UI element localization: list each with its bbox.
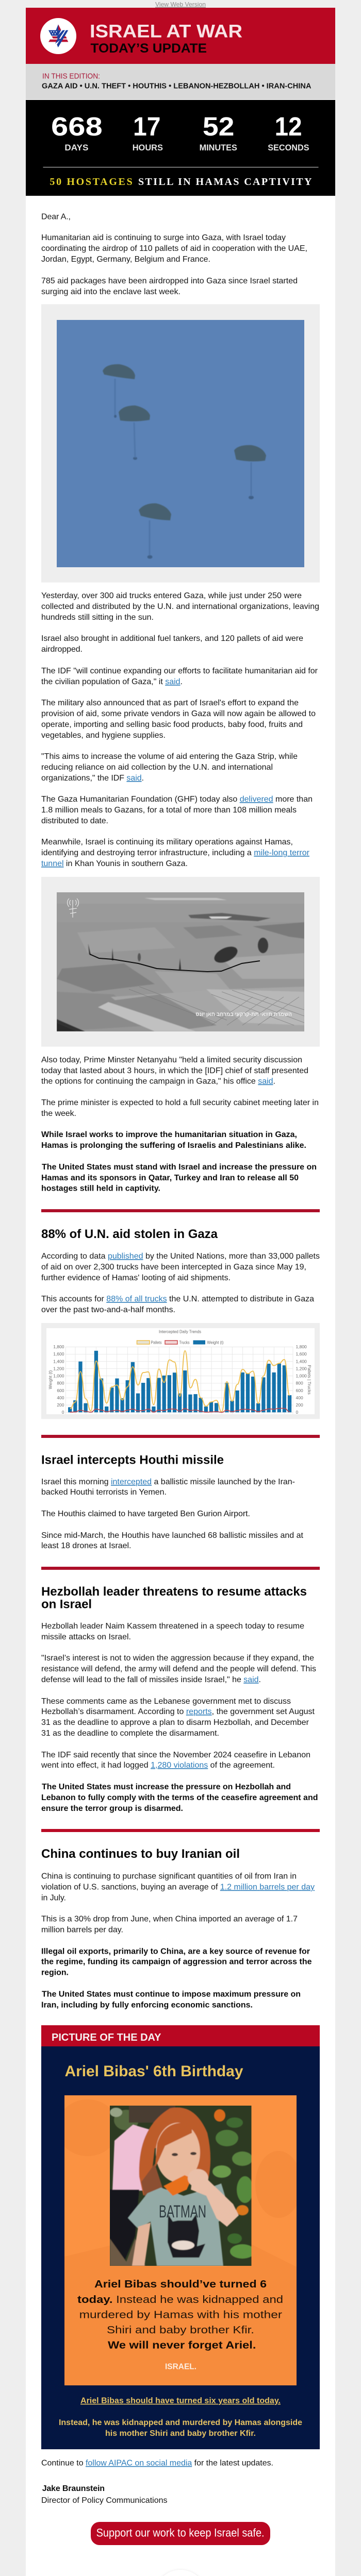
bold paragraph: illegal oil exports: region. [41,1969,69,1977]
paragraph: private vendors: vegetables, and hygiene supplies. [41,731,166,740]
left axis labels: 800 [57,1381,64,1386]
paragraph: GHF meals: distributed to date. [41,817,108,825]
paragraph: 88 percent of trucks: This accounts for 88% of all trucks the U.N. attempted to distribute in Gaza [41,1295,314,1303]
left axis labels: 1,400 [53,1359,64,1364]
icon: AIPAC logo badge [155,2570,206,2576]
paragraph: Kassem speech [41,1622,304,1641]
paragraph: fuel tankers: airdropped. [41,645,83,654]
paragraph: 88 percent of trucks [41,1295,314,1314]
paragraph: missile count: Since mid-March, the Houthis have launched 68 ballistic missiles and at [41,1531,304,1540]
chart title: Intercepted Daily Trends [159,1329,201,1334]
view web version link: View Web Version [155,1,206,8]
paragraph: intercepted pallets: According to data published by the United Nations, more than 33,000 pallets [41,1252,320,1261]
heading: Hezbollah threat: on Israel [41,1597,92,1612]
donation button [91,2522,270,2545]
bold paragraph: Hamas prolonging suffering [41,1130,306,1150]
paragraph: aid trucks [41,591,319,622]
paragraph: Houthi interception [41,1478,295,1497]
heading: UN aid stolen: 88% of U.N. aid stolen in Gaza [41,1227,218,1241]
paragraph: China purchases: in July. [41,1894,66,1903]
countdown: seconds [268,112,309,152]
chart: intercepted daily trends [41,1323,320,1419]
right axis labels: 200 [296,1402,303,1408]
intro paragraph: Jordan, Egypt, Germany, Belgium and France. [41,255,210,264]
paragraph: security discussion [41,1056,308,1086]
paragraph: China purchases: China is continuing to purchase significant quantities of oil from Iran in [41,1872,297,1881]
sub-element: memorial message: We will never forget Ariel. [108,2340,256,2351]
greeting: Dear A., [41,212,71,221]
paragraph: security cabinet [41,1098,319,1118]
paragraph: June comparison: This is a 30% drop from June, when China imported an average of 1.7 [41,1915,298,1924]
sub-element: rubble grid texture [129,987,304,1025]
left axis labels [53,1344,64,1415]
sub-element: memorial message: Shiri and baby brother Kfir. [107,2325,254,2336]
sub-element: hebrew caption: השמדת תוואי תת-קרקעי במרחב חאן יונס [196,1011,292,1018]
sub-element: memorial message: today. Instead he was kidnapped and [77,2294,283,2306]
paragraph: Houthi interception: Israel this morning intercepted a ballistic missile launched by the Iran- [41,1478,295,1486]
panel: in this edition [26,64,335,99]
paragraph: private vendors: provision of aid, some private vendors in Gaza will now again be allowed to [41,709,316,718]
panel: in this edition: GAZA AID • U.N. THEFT • HOUTHIS • LEBANON-HEZBOLLAH • IRAN-CHINA [42,82,311,90]
picture caption: Ariel Bibas should have turned six years old today. [80,2397,281,2405]
left axis labels: 1,000 [53,1374,64,1379]
paragraph: GHF meals: The Gaza Humanitarian Foundation (GHF) today also delivered more than [41,795,313,804]
right axis labels: 0 [296,1410,298,1415]
sub-element: collapse smoke plumes [88,938,268,970]
chart legend: Trucks [179,1340,190,1345]
picture title: Ariel Bibas' 6th Birthday [65,2063,243,2080]
left axis labels: 600 [57,1388,64,1393]
right axis labels: 1,800 [296,1344,307,1349]
right axis labels: 1,400 [296,1359,307,1364]
countdown: days: DAYS [64,143,88,152]
countdown: minutes: 52 [203,112,234,141]
sub-element: watermark shapes [57,2099,302,2385]
paragraph: IDF quote: organizations," the IDF said. [41,774,144,783]
bold paragraph: maximum pressure: The United States must continue to impose maximum pressure on [42,1990,301,1999]
pallets line [70,1351,290,1412]
right axis labels: 400 [296,1395,303,1400]
heading: Hezbollah threat: Hezbollah leader threatens to resume attacks [41,1585,307,1599]
paragraph: Kassem quote: resistance will defend, the army will defend and the people will defend. This [41,1665,316,1673]
intro paragraph: coordinating the airdrop of 110 pallets of aid in cooperation with the UAE, [41,244,307,253]
countdown: minutes [200,112,237,152]
paragraph: disarmament deadlines: Hezbollah’s disarmament. According to reports, the government set August [41,1707,315,1716]
header banner [26,8,335,64]
countdown: seconds: SECONDS [268,143,309,152]
sub-element: child photo [110,2106,255,2266]
bold paragraph: illegal oil exports: Illegal oil exports, primarily to China, are a key source of revenue for [41,1947,310,1956]
intro paragraph [41,233,307,264]
heading: Houthi missile: Israel intercepts Houthi missile [41,1453,224,1467]
paragraph: security discussion: Also today, Prime Minster Netanyahu "held a limited security discussion [41,1056,302,1064]
countdown: seconds: 12 [275,112,302,141]
signature [41,2484,167,2505]
panel: picture of the day [41,2025,320,2449]
panel: mission footer [26,2570,335,2576]
bold paragraph: US call to action: The United States must stand with Israel and increase the pressure on [42,1163,317,1172]
panel header: PICTURE OF THE DAY [52,2032,161,2043]
hostages count line: STILL IN HAMAS CAPTIVITY [138,176,312,188]
left axis labels: 1,800 [53,1344,64,1349]
paragraph: intercepted pallets [41,1252,320,1282]
memorial graphic [57,2095,302,2385]
heading: Hezbollah threat [41,1585,307,1612]
paragraph: June comparison [41,1915,298,1935]
bold paragraph: maximum pressure [41,1990,301,2010]
sub-element: memorial message: murdered by Hamas with his mother [79,2309,282,2320]
chart legend: Pallets [151,1340,162,1345]
left axis labels: 0 [62,1410,64,1415]
paragraph: aid trucks: hundreds still sitting in the sun. [41,613,154,622]
airdrop paragraph [41,277,298,296]
paragraph: private vendors [41,699,316,740]
bold paragraph: US call to action: hostages still held in captivity. [41,1184,160,1193]
panel: war countdown [26,100,335,196]
banner subtitle: TODAY’S UPDATE [91,41,207,56]
paragraph: follow on social media: Continue to follow AIPAC on social media for the latest updates. [41,2459,273,2468]
right axis labels: 1,000 [296,1374,307,1379]
paragraph: ceasefire violations: went into effect, it had logged 1,280 violations of the agreement. [41,1761,275,1770]
paragraph: fuel tankers [41,634,303,654]
sub-element: memorial message: Ariel Bibas should’ve turned 6 [94,2279,267,2290]
panel header [41,2025,320,2046]
paragraph: private vendors: The military also announced that as part of Israel's effort to expand the [41,699,299,707]
paragraph: 88 percent of trucks: over the past two-and-a-half months. [41,1306,175,1314]
airdrop paragraph: 785 aid packages have been airdropped into Gaza since Israel started [41,277,298,285]
chart gridlines [65,1347,293,1414]
signature: Director of Policy Communications [41,2496,167,2505]
picture caption: his mother Shiri and baby brother Kfir. [105,2429,256,2438]
sub-element: shirt lettering: BATMAN [159,2202,206,2222]
paragraph: China purchases [41,1872,315,1903]
paragraph: Kassem speech: Hezbollah leader Naim Kassem threatened in a speech today to resume [41,1622,304,1631]
photo: parachute airdrop [41,304,320,582]
chart legend: Weight (t) [207,1340,224,1345]
paragraph: private vendors: operate, importing and selling basic food products, baby food, fruits and [41,720,303,729]
paragraph: IDF quote: reducing reliance on aid collection by the U.N. and international [41,763,273,772]
paragraph: Kassem quote: "Israel’s interest is not to widen the aggression because if they expand, the [41,1654,314,1663]
picture caption: Instead, he was kidnapped and murdered by Hamas alongside [59,2418,302,2427]
right axis labels: 800 [296,1381,303,1386]
paragraph: IDF statement: The IDF "will continue expanding our efforts to facilitate humanitarian aid for [41,667,318,675]
bold paragraph: maximum pressure: Iran, including by fully enforcing economic sanctions. [41,2001,253,2010]
bold paragraph: US call to action [41,1163,317,1193]
paragraph: military operations: identifying and destroying terror infrastructure, including a mile-long terror [41,849,310,857]
countdown: hours: 17 [133,112,161,141]
paragraph: IDF statement [41,667,318,686]
paragraph: aid trucks: Yesterday, over 300 aid trucks entered Gaza, while just under 250 were [41,591,302,600]
bold paragraph: US pressure on Hezbollah: Lebanon to fully comply with the terms of the ceasefire agreement and [41,1793,318,1802]
chart legend [137,1340,224,1345]
paragraph: aid trucks: collected and distributed by the U.N. and international organizations, leaving [41,602,319,611]
countdown: hours: HOURS [133,143,163,152]
paragraph: intercepted pallets: further evidence of Hamas' looting of aid shipments. [41,1274,231,1282]
paragraph: IDF statement: the civilian population of Gaza," it said. [41,677,183,686]
countdown: days: 668 [51,112,103,141]
paragraph: IDF quote [41,752,298,783]
paragraph: missile count: least 18 drones at Israel. [41,1541,131,1550]
paragraph: ceasefire violations [41,1751,310,1770]
paragraph: intercepted pallets: of aid on over 2,300 trucks have been intercepted in Gaza since May 19, [41,1263,306,1272]
right axis labels: 1,200 [296,1366,307,1371]
countdown: days [51,112,103,152]
panel: in this edition: IN THIS EDITION: [42,72,100,80]
bold paragraph: US pressure on Hezbollah [41,1783,318,1813]
paragraph: security cabinet: the week. [41,1109,76,1118]
banner title: ISRAEL AT WAR [90,22,242,41]
left axis title: Weight (t) [47,1370,53,1389]
paragraph: security discussion: the options for continuing the campaign in Gaza," his office said. [41,1077,275,1086]
paragraph: fuel tankers: Israel also brought in additional fuel tankers, and 120 pallets of aid were [41,634,303,643]
sub-element: IDF logo [68,899,78,918]
sub-element: memorial message [77,2279,283,2351]
paragraph: GHF meals: 1.8 million meals to Gazans, for a total of more than 108 million meals [41,806,297,815]
intro paragraph: Humanitarian aid is continuing to surge into Gaza, with Israel today [41,233,286,242]
bold paragraph: illegal oil exports: the regime, funding its campaign of aggression and terror across the [41,1958,312,1967]
paragraph: security cabinet: The prime minister is expected to hold a full security cabinet meeting later in [41,1098,319,1107]
donation button: Support our work to keep Israel safe. [96,2527,265,2539]
signature: Jake Braunstein [42,2484,105,2493]
weight bars [68,1351,291,1412]
paragraph: IDF quote: "This aims to increase the volume of aid entering the Gaza Strip, while [41,752,298,761]
paragraph: GHF meals [41,795,313,825]
paragraph: ceasefire violations: The IDF said recently that since the November 2024 ceasefire in Lebanon [41,1751,310,1759]
heading: China Iranian oil: China continues to buy Iranian oil [41,1847,240,1861]
paragraph: missile count [41,1531,304,1550]
paragraph: disarmament deadlines: 31 as the deadline to complete the disarmament. [41,1729,219,1738]
paragraph: disarmament deadlines: 31 as the deadline to approve a plan to disarm Hezbollah, and December [41,1718,309,1727]
hostages count line [50,176,312,188]
bold paragraph: illegal oil exports [41,1947,312,1977]
paragraph: China purchases: violation of U.S. sanctions, buying an average of 1.2 million barrels per day [41,1883,315,1892]
bold paragraph: US pressure on Hezbollah: ensure the terror group is disarmed. [41,1804,183,1813]
right axis title: Pallets | Trucks [307,1365,312,1395]
picture caption [59,2397,302,2438]
bold paragraph: Hamas prolonging suffering: Hamas is prolonging the suffering of Israelis and Palestinians alike. [41,1141,306,1150]
trucks line [70,1409,290,1412]
left axis labels: 400 [57,1395,64,1400]
paragraph: Kassem speech: missile attacks on Israel. [41,1633,131,1641]
countdown: hours [133,112,163,152]
paragraph: disarmament deadlines [41,1697,315,1738]
airdrop paragraph: surging aid into the enclave last week. [41,287,180,296]
countdown: minutes: MINUTES [200,143,237,152]
left axis labels: 200 [57,1402,64,1408]
right axis labels: 600 [296,1388,303,1393]
paragraph: security discussion: today that lasted about 3 hours, in which the [IDF] chief of staff presented [41,1066,308,1075]
paragraph: Kassem quote [41,1654,316,1684]
left axis labels: 1,200 [53,1366,64,1371]
right axis labels [296,1344,307,1415]
right axis labels: 1,600 [296,1351,307,1357]
hostages count line: 50 HOSTAGES [50,176,133,188]
left axis labels: 1,600 [53,1351,64,1357]
sub-element: Israel wordmark: ISRAEL. [165,2363,196,2371]
paragraph: June comparison: million barrels per day. [41,1926,123,1935]
paragraph: Houthi interception: backed Houthi terrorists in Yemen. [41,1488,167,1497]
bold paragraph: US pressure on Hezbollah: The United States must increase the pressure on Hezbollah and [42,1783,291,1791]
bold paragraph: US call to action: Hamas and its sponsors in Qatar, Turkey and Iran to release all 50 [41,1174,299,1182]
paragraph: Kassem quote: defense will lead to the fall of missiles inside Israel," he said. [41,1675,261,1684]
icon: AIPAC logo badge [40,18,76,54]
photo: aerial view of destroyed tunnel [41,877,320,1047]
paragraph: military operations [41,838,310,868]
paragraph: military operations: Meanwhile, Israel is continuing its military operations against Hamas, [41,838,293,846]
paragraph: military operations: tunnel in Khan Younis in southern Gaza. [41,859,188,868]
paragraph: disarmament deadlines: These comments came as the Lebanese government met to discuss [41,1697,291,1706]
sub-element: tunnel line [90,954,260,972]
paragraph: Ben Gurion target: The Houthis claimed to have targeted Ben Gurion Airport. [41,1510,250,1518]
bold paragraph: Hamas prolonging suffering: While Israel works to improve the humanitarian situation in Gaza, [41,1130,297,1139]
